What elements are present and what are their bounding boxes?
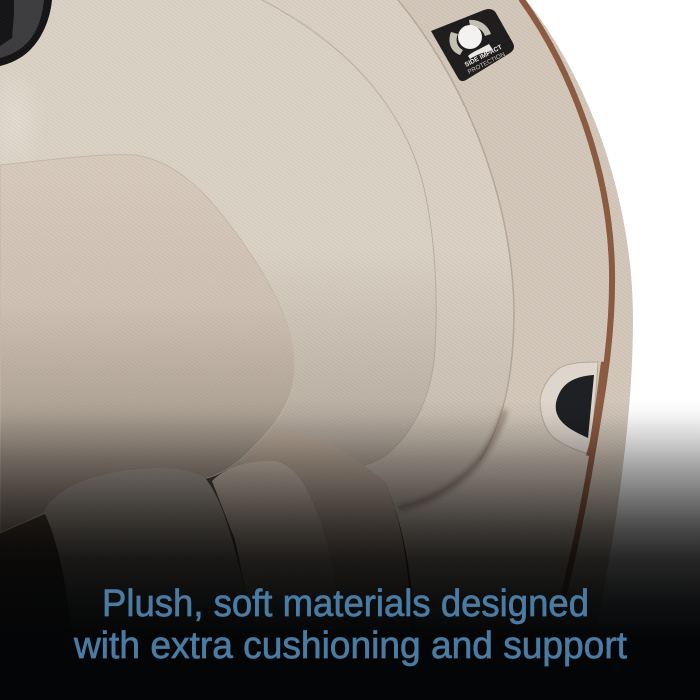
- tag body: [431, 9, 514, 81]
- tag text: SIDE IMPACT: [464, 44, 503, 69]
- slot rim: [540, 362, 598, 453]
- lower left cushion: [44, 468, 256, 640]
- outer wing cushion: [262, 0, 514, 508]
- lower middle cushion: [212, 461, 340, 640]
- slot opening: [556, 375, 594, 438]
- tag text second line: PROTECTION: [467, 51, 506, 76]
- piping over slot: [589, 362, 604, 456]
- tag icon: head: [458, 25, 482, 49]
- belt slot: [540, 362, 604, 456]
- brown piping: [522, 0, 612, 610]
- dark headrest hardware: [0, 0, 52, 66]
- side impact protection tag: [431, 9, 514, 81]
- wing seam: [398, 0, 514, 460]
- wing lower shadow: [398, 410, 505, 509]
- caption: [73, 583, 627, 667]
- bottom dark gradient: [0, 400, 700, 700]
- dark base under the cushions: [0, 470, 425, 700]
- fabric texture: [0, 0, 632, 426]
- caption line 1: Plush, soft materials designed: [102, 583, 589, 625]
- inner back panel: [0, 0, 436, 480]
- inner panel seam: [262, 0, 436, 469]
- head pillow: [0, 155, 295, 533]
- tag icon: side arcs: [449, 32, 463, 55]
- rear seat cushion: [240, 431, 412, 640]
- panel highlight: [0, 60, 47, 180]
- tag icon: shoulders: [468, 44, 493, 59]
- caption line 2: with extra cushioning and support: [73, 625, 627, 667]
